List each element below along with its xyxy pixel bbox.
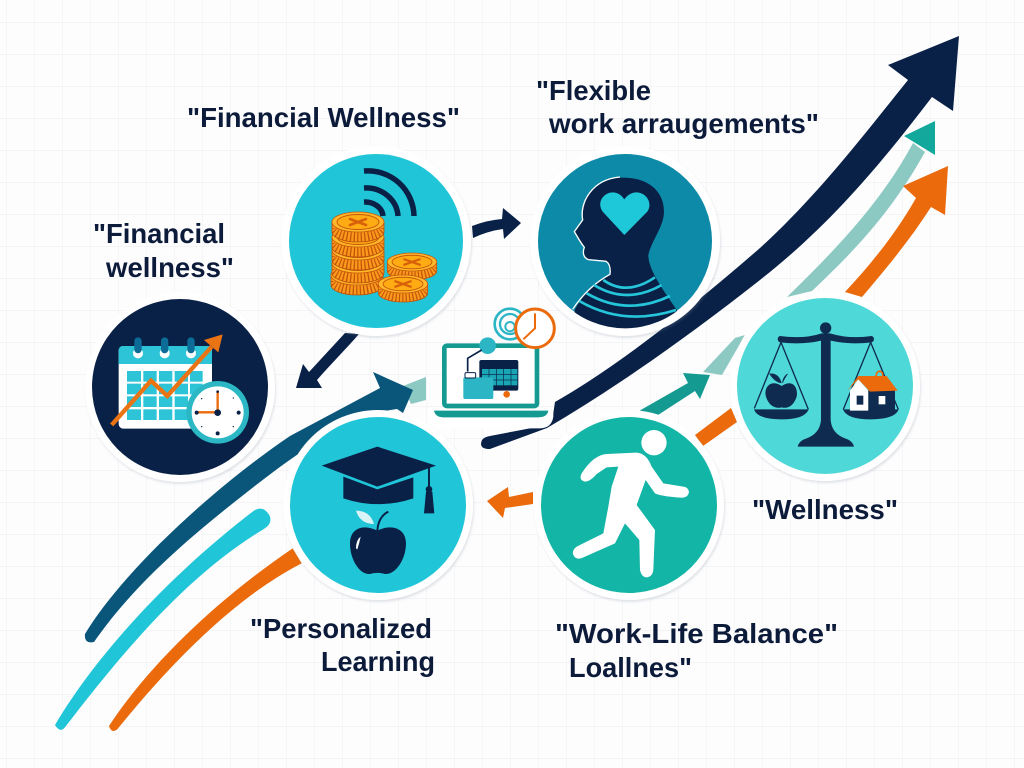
heading: Financial wellness: "Financial [93,218,225,249]
heading: Work-Life Balance: Loallnes" [569,652,692,683]
heading: Personalized Learning [250,613,435,677]
arrow: orange leftward arrow [487,487,533,518]
arrow: light teal connector by laptop [403,377,426,404]
icon: calendar with trend arrow and clock [112,334,249,444]
arrow: teal middle arrow [639,373,710,415]
heading: Flexible work arrangements: work arraugements" [548,108,819,139]
heading: Flexible work arrangements: "Flexible [536,75,651,106]
streak: cyan swoosh [55,509,270,730]
arrow: dark blue rising arrow [85,372,413,642]
icon: head silhouette with heart [570,177,677,340]
heading: Personalized Learning: "Personalized [250,613,432,644]
arrow: orange upper arrow [845,166,948,297]
icon: running figure [573,430,689,577]
icon: laptop with calendar and clock [428,309,554,428]
heading: Financial wellness: wellness" [105,252,234,283]
panel: graduation circle [283,410,473,600]
icon: graduation cap and apple [322,447,436,574]
heading: Financial wellness [93,218,234,283]
arrow: teal arrowhead, upper right [904,121,935,155]
panel: head circle [530,146,720,340]
heading: Personalized Learning: Learning [321,646,435,677]
panel: runner circle [534,410,724,600]
heading: Work-Life Balance [555,618,838,683]
streak: orange swoosh [109,548,302,731]
arrow: navy curved arrow from coins to head [472,208,521,239]
arrow: light teal upper shaft [787,143,925,297]
icon: signal arcs [364,171,414,216]
heading: Wellness: "Wellness" [752,494,898,525]
arrow: light teal wedge by scales circle [703,335,745,375]
heading: Financial Wellness: "Financial Wellness" [187,102,460,133]
arrow: orange middle segment [695,408,737,446]
arrow: navy arrow from coins to calendar [296,333,359,388]
icon: coin stacks [331,212,437,302]
panel: coins circle [281,146,471,336]
icon: balance scale with apple and house [754,322,899,447]
arrow: big navy rising arrow [481,36,959,449]
heading: Flexible work arrangements [536,75,819,139]
panel: calendar circle [85,292,275,482]
panel: scales circle [730,291,920,481]
heading: Work-Life Balance: "Work-Life Balance" [555,618,838,649]
